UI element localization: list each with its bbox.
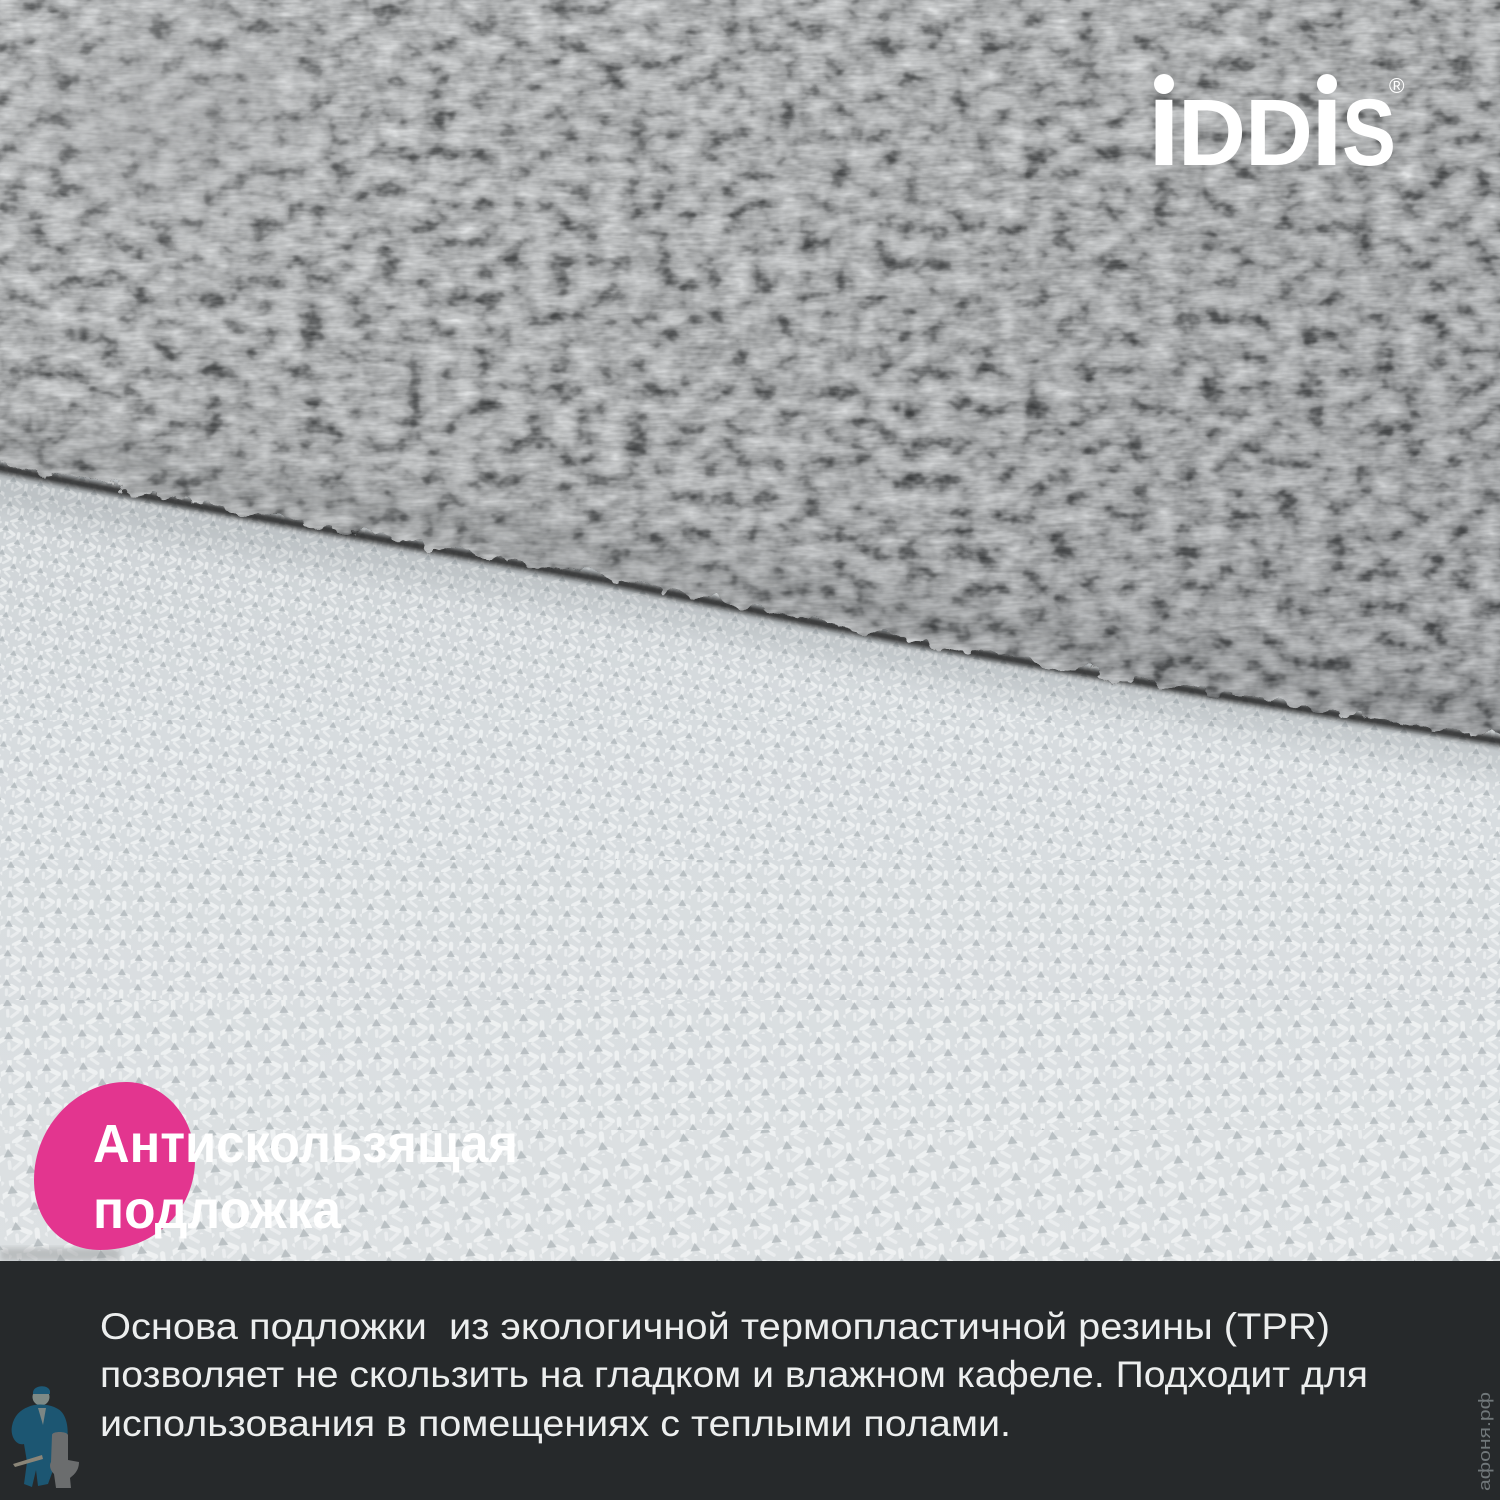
logo: iDDiS: i: [1147, 55, 1181, 192]
photo: grey fluffy pile: [0, 0, 1500, 745]
logo: iDDiS: D: [1245, 80, 1313, 186]
heading: [93, 1114, 518, 1240]
photo: soft worn patch at top left: [40, 50, 300, 190]
pink blob behind heading: [34, 1082, 195, 1250]
logo: iDDiS: i: [1310, 55, 1344, 192]
photo: knitted anti-slip backing: [0, 440, 1500, 1261]
photo: grey edge at lower left: [0, 1248, 120, 1261]
icon: plumber with toilet: [12, 1386, 79, 1488]
description text: использования в помещениях с теплыми полами.: [100, 1403, 1011, 1444]
description text: [100, 1306, 1368, 1444]
logo: iDDiS: S: [1342, 80, 1396, 186]
logo: iDDiS: [1154, 74, 1404, 166]
dark description panel: [0, 1261, 1500, 1500]
description text: позволяет не скользить на гладком и влажном кафеле. Подходит для: [100, 1354, 1368, 1395]
watermark: афоня.рф: [1475, 1392, 1494, 1491]
logo: iDDiS: ®: [1389, 75, 1405, 98]
logo: iDDiS: D: [1178, 80, 1246, 186]
photo: fold shading along the lower pile edge: [0, 430, 1500, 716]
photo: shadow under the pile: [0, 462, 1500, 760]
heading: Антискользящая: [93, 1114, 518, 1174]
heading: подложка: [93, 1180, 342, 1240]
description text: Основа подложки из экологичной термопластичной резины (TPR): [100, 1306, 1330, 1347]
